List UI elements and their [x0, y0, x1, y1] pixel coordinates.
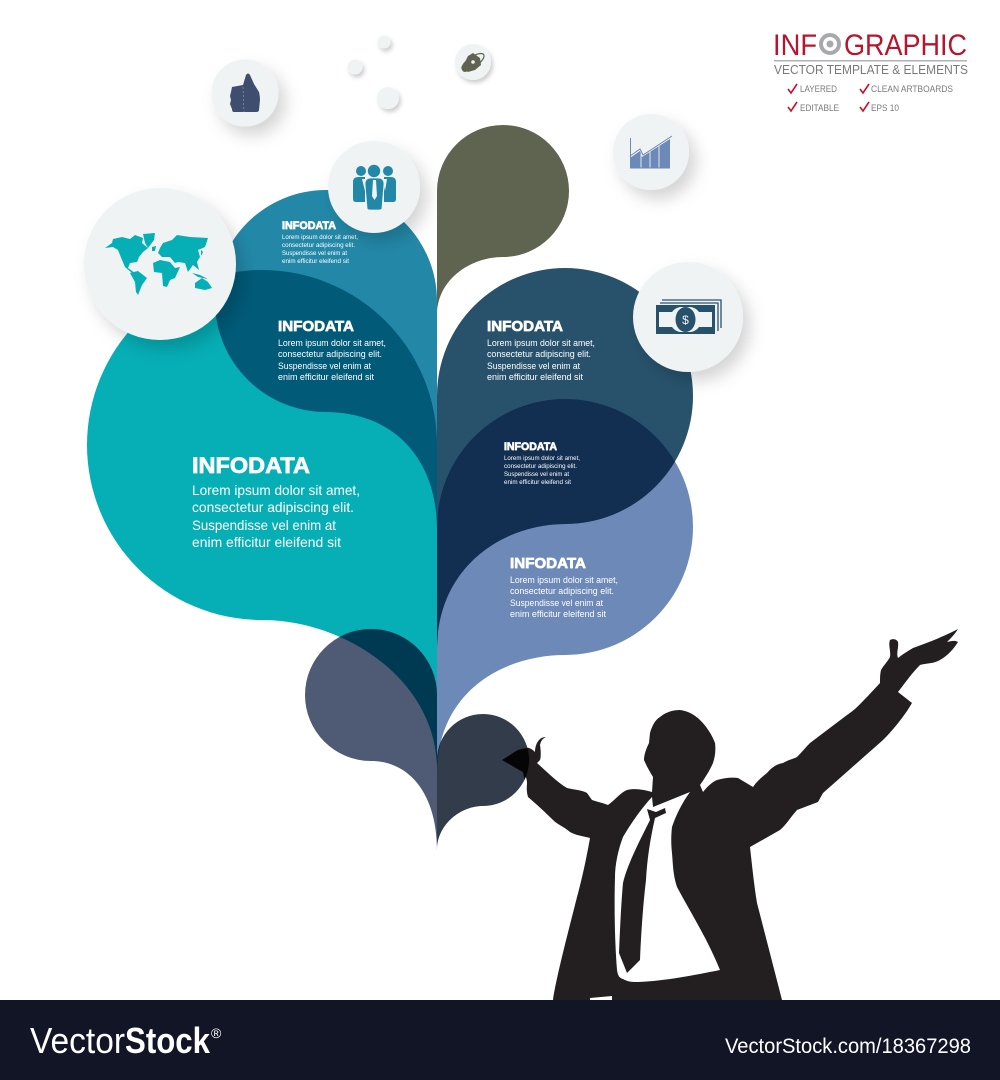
label: navy petal text: Lorem ipsum dolor sit amet, — [487, 338, 595, 348]
label: blue petal text: INFODATA — [282, 220, 336, 232]
icon: growth chart — [613, 114, 689, 190]
label: deep navy overlap text: consectetur adipiscing elit. — [504, 463, 577, 470]
panel: navy petal — [437, 268, 693, 650]
panel: light blue petal — [437, 399, 693, 775]
icon: target letter O — [821, 35, 839, 53]
logo: infographic title block: EDITABLE — [800, 103, 839, 113]
label: blue petal text: enim efficitur eleifend sit — [282, 258, 349, 265]
label: large teal petal text: consectetur adipiscing elit. — [192, 499, 354, 515]
label: navy petal text: enim efficitur eleifend sit — [487, 372, 583, 382]
label: light blue petal text — [510, 555, 618, 619]
panel: dark teal overlap — [216, 270, 437, 528]
label: large teal petal text: Lorem ipsum dolor sit amet, — [192, 482, 360, 498]
label: deep navy overlap text: enim efficitur eleifend sit — [504, 479, 571, 486]
footer bar — [0, 1000, 1000, 1080]
icon: world map — [84, 188, 236, 340]
label: light blue petal text: enim efficitur eleifend sit — [510, 609, 606, 619]
label: large teal petal text: Suspendisse vel enim at — [192, 517, 336, 533]
label: dark teal overlap text: consectetur adipiscing elit. — [278, 349, 382, 359]
shirt — [615, 792, 720, 982]
label: navy petal text: consectetur adipiscing elit. — [487, 349, 591, 359]
footer logo — [30, 1020, 222, 1061]
logo: infographic title block — [773, 29, 968, 113]
logo: infographic title block: EPS 10 — [871, 103, 899, 113]
footer logo: ® — [211, 1025, 222, 1041]
panel: charcoal lower-right petal — [436, 714, 528, 850]
label: large teal petal text: enim efficitur eleifend sit — [192, 534, 341, 550]
logo: infographic title block: LAYERED — [800, 84, 837, 94]
necktie — [619, 808, 666, 973]
label: deep navy overlap text: Lorem ipsum dolor sit amet, — [504, 455, 580, 462]
icon: thumbs up — [212, 60, 278, 126]
label: blue petal text: Suspendisse vel enim at — [282, 250, 347, 257]
label: light blue petal text: Lorem ipsum dolor sit amet, — [510, 575, 618, 585]
panel: large teal petal — [87, 270, 437, 770]
panel: deep navy overlap — [437, 399, 675, 646]
footer url: VectorStock.com/18367298 — [725, 1035, 971, 1058]
footer logo: Vector — [30, 1020, 125, 1061]
label: dark teal overlap text — [278, 318, 386, 382]
decorative dot left — [348, 60, 362, 74]
icon: banknotes: $ — [682, 313, 689, 327]
label: blue petal text: Lorem ipsum dolor sit amet, — [282, 234, 358, 241]
label: navy petal text: INFODATA — [487, 318, 563, 335]
label: blue petal text: consectetur adipiscing elit. — [282, 242, 355, 249]
label: dark teal overlap text: Lorem ipsum dolor sit amet, — [278, 338, 386, 348]
label: deep navy overlap text: INFODATA — [504, 441, 557, 453]
logo: infographic title block: CLEAN ARTBOARDS — [871, 84, 953, 94]
label: blue petal text — [282, 220, 358, 265]
label: large teal petal text — [192, 453, 360, 550]
decorative dot lower — [377, 87, 399, 109]
label: dark teal overlap text: enim efficitur eleifend sit — [278, 372, 374, 382]
label: navy petal text — [487, 318, 595, 382]
decorative dot top — [378, 36, 390, 48]
logo: infographic title block: GRAPHIC — [844, 29, 967, 62]
label: dark teal overlap text: INFODATA — [278, 318, 354, 335]
icon: atom — [455, 44, 491, 80]
panel: olive petal — [437, 125, 569, 315]
label: light blue petal text: Suspendisse vel enim at — [510, 598, 603, 608]
label: light blue petal text: INFODATA — [510, 555, 586, 572]
logo: infographic title block: VECTOR TEMPLATE & ELEMENTS — [774, 63, 968, 77]
icon: team of people — [328, 141, 420, 233]
logo: infographic title block: INF — [773, 29, 817, 62]
label: deep navy overlap text: Suspendisse vel enim at — [504, 471, 569, 478]
footer logo: Stock — [125, 1020, 211, 1061]
businessman silhouette — [502, 629, 958, 1000]
panel: blue petal — [215, 190, 437, 530]
label: navy petal text: Suspendisse vel enim at — [487, 361, 580, 371]
label: dark teal overlap text: Suspendisse vel enim at — [278, 361, 371, 371]
label: deep navy overlap text — [504, 441, 580, 486]
label: large teal petal text: INFODATA — [192, 453, 310, 478]
icon: banknotes — [633, 262, 743, 372]
label: light blue petal text: consectetur adipiscing elit. — [510, 586, 614, 596]
panel: slate lower-left petal — [305, 629, 437, 850]
